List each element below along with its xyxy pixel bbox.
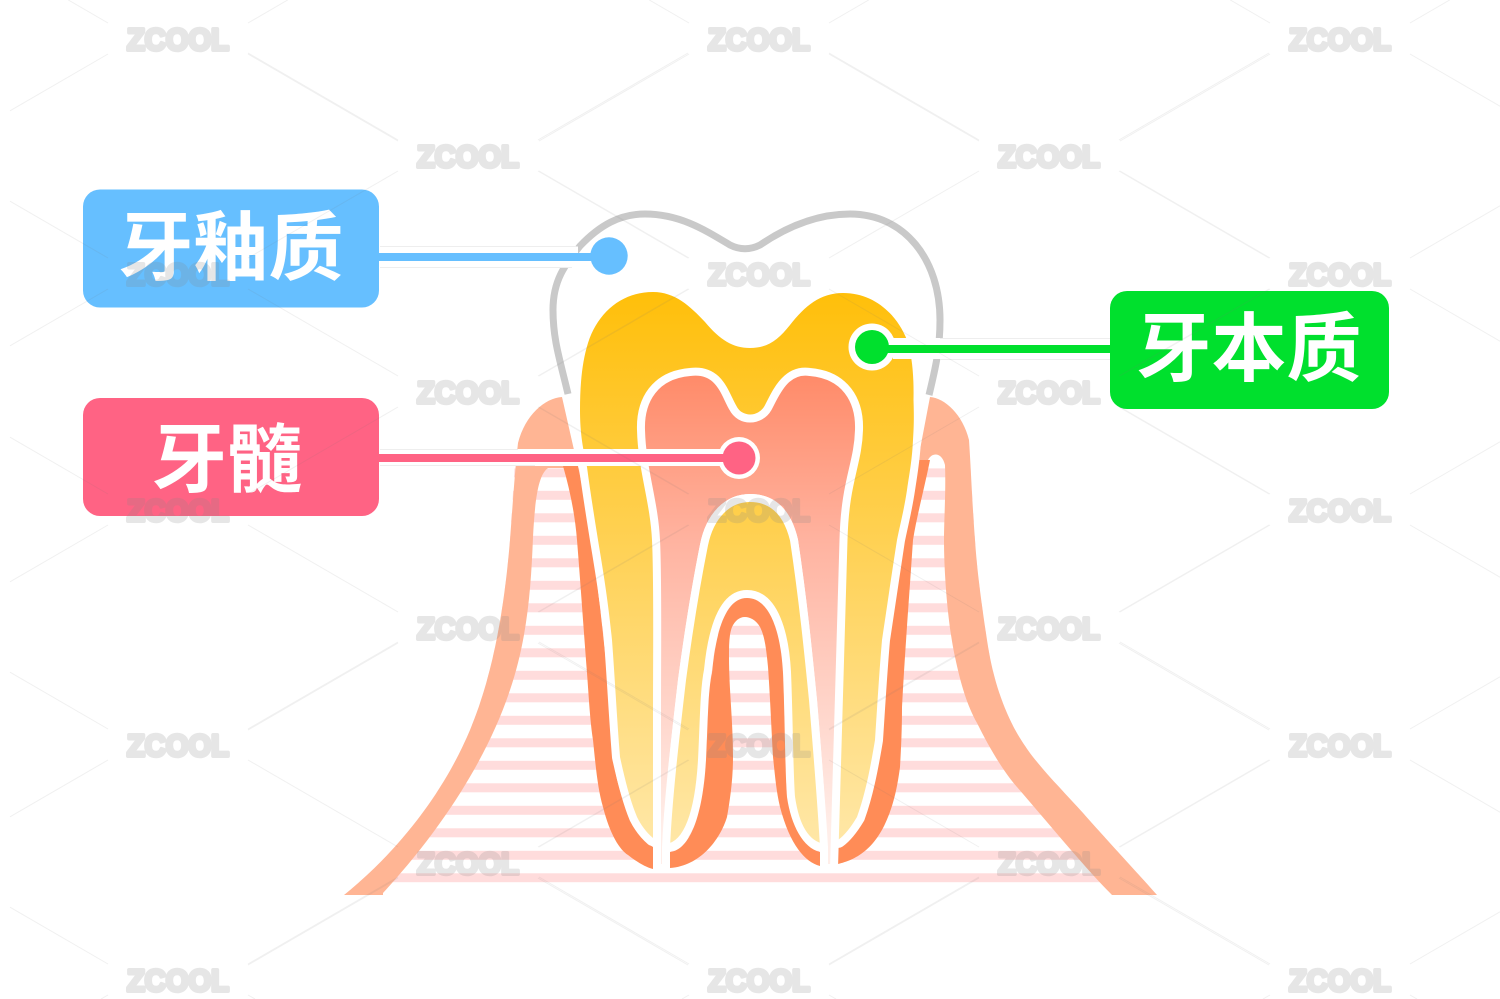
watermark pattern: ZCOOL: [417, 139, 519, 174]
watermark pattern: ZCOOL: [417, 611, 519, 646]
connector: pulp leader line: [379, 449, 729, 466]
tooth enamel outline: [553, 214, 940, 395]
jaw bone: pink striped area: [340, 468, 1160, 882]
label: pulp: 牙髓: [152, 418, 302, 502]
marker: pulp dot ring: [718, 437, 760, 479]
watermark pattern: ZCOOL: [127, 728, 229, 763]
watermark pattern: ZCOOL: [417, 846, 519, 881]
label: enamel: [83, 190, 379, 308]
watermark pattern: ZCOOL: [708, 257, 810, 292]
label: dentin: 牙本质: [1136, 307, 1362, 391]
watermark pattern: ZCOOL: [998, 611, 1100, 646]
pulp chamber and root canals: [641, 372, 859, 868]
watermark pattern: ZCOOL: [1289, 22, 1391, 57]
gum tissue: [344, 397, 1157, 895]
watermark pattern: ZCOOL: [998, 846, 1100, 881]
connector: dentin leader line: [880, 338, 1111, 360]
marker: dentin dot ring: [848, 324, 896, 370]
dentin: crown and outer root walls: [580, 292, 914, 840]
marker: dentin dot: [855, 330, 889, 364]
label: enamel: 牙釉质: [118, 206, 344, 290]
watermark pattern: ZCOOL: [127, 22, 229, 57]
dentin between the two roots: [666, 498, 824, 868]
watermark pattern: ZCOOL: [998, 139, 1100, 174]
watermark pattern: ZCOOL: [1289, 728, 1391, 763]
watermark pattern: ZCOOL: [708, 728, 810, 763]
marker: pulp dot: [722, 442, 756, 474]
watermark pattern: ZCOOL: [708, 22, 810, 57]
watermark pattern: ZCOOL: [417, 375, 519, 410]
watermark pattern: ZCOOL: [127, 963, 229, 998]
label: pulp: [83, 398, 379, 516]
connector: enamel leader line: [379, 246, 599, 268]
root cementum: orange arch between roots: [670, 598, 820, 868]
watermark pattern: ZCOOL: [127, 493, 229, 528]
marker: enamel dot: [590, 237, 628, 275]
watermark pattern: ZCOOL: [1289, 493, 1391, 528]
watermark pattern: ZCOOL: [998, 375, 1100, 410]
root cementum: outer orange bands: [563, 460, 930, 869]
watermark pattern: ZCOOL: [1289, 257, 1391, 292]
label: dentin: [1110, 291, 1389, 409]
watermark pattern: ZCOOL: [708, 493, 810, 528]
watermark pattern: ZCOOL: [1289, 963, 1391, 998]
watermark pattern: ZCOOL: [127, 257, 229, 292]
watermark pattern: ZCOOL: [708, 963, 810, 998]
